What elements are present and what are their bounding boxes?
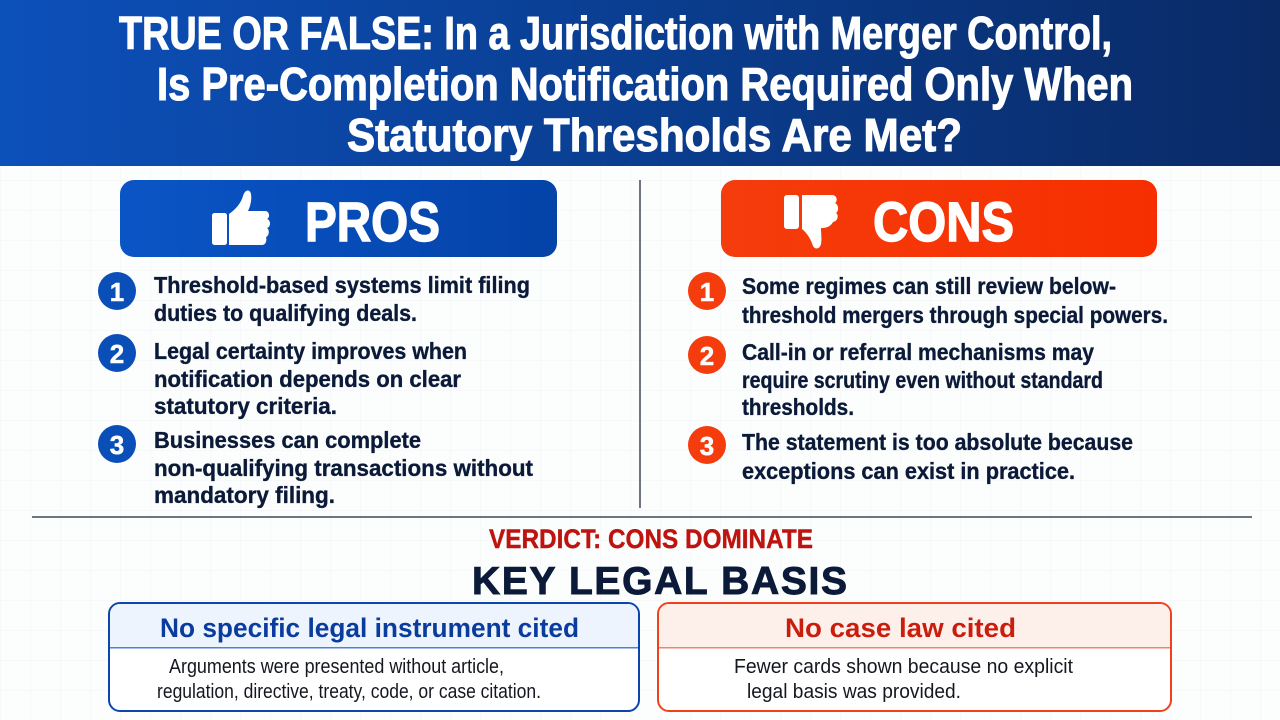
pro item 3: 3 — [110, 430, 124, 460]
verdict: VERDICT: CONS DOMINATE — [489, 524, 813, 554]
card: legal instrument: No specific legal instrument cited — [160, 613, 579, 643]
title banner: Statutory Thresholds Are Met? — [347, 109, 962, 161]
pro item 2: notification depends on clear — [154, 366, 461, 392]
con item 3 — [688, 426, 1133, 484]
con item 2: Call-in or referral mechanisms may — [742, 339, 1094, 365]
card: case law: No case law cited — [785, 613, 1016, 643]
pro item 2 — [98, 334, 467, 419]
pros heading: PROS — [305, 190, 440, 253]
pro item 1: Threshold-based systems limit filing — [154, 272, 530, 298]
card: legal instrument — [109, 603, 639, 711]
pro item 2: Legal certainty improves when — [154, 338, 467, 364]
panel: cons — [688, 180, 1168, 484]
con item 3: The statement is too absolute because — [742, 429, 1133, 455]
pro item 1: 1 — [110, 277, 124, 307]
panel: pros — [98, 180, 557, 508]
con item 1: 1 — [700, 277, 714, 307]
icon: thumbs up — [212, 190, 270, 245]
title banner: Is Pre-Completion Notification Required Only When — [157, 58, 1133, 110]
card: legal instrument: regulation, directive, treaty, code, or case citation. — [157, 681, 541, 703]
con item 1: Some regimes can still review below- — [742, 273, 1116, 299]
icon: thumbs down — [784, 195, 838, 248]
con item 2: 2 — [700, 341, 714, 371]
title banner — [0, 0, 1280, 166]
key legal basis heading: KEY LEGAL BASIS — [472, 560, 847, 603]
cons heading: CONS — [873, 190, 1014, 253]
card: case law — [658, 603, 1171, 711]
con item 2 — [688, 336, 1103, 420]
con item 3: 3 — [700, 431, 714, 461]
pro item 1: duties to qualifying deals. — [154, 300, 417, 326]
card: legal instrument: Arguments were presented without article, — [169, 656, 504, 678]
card: case law: legal basis was provided. — [747, 681, 961, 703]
con item 2: require scrutiny even without standard — [742, 367, 1103, 393]
pro item 1 — [98, 272, 530, 326]
con item 1: threshold mergers through special powers. — [742, 302, 1168, 328]
pro item 3: mandatory filing. — [154, 482, 335, 508]
cons heading — [721, 180, 1157, 257]
pro item 3: Businesses can complete — [154, 427, 421, 453]
con item 3: exceptions can exist in practice. — [742, 458, 1075, 484]
pro item 3 — [98, 425, 533, 508]
pro item 3: non-qualifying transactions without — [154, 455, 533, 481]
card: case law: Fewer cards shown because no explicit — [734, 656, 1073, 678]
pro item 2: statutory criteria. — [154, 393, 337, 419]
pro item 2: 2 — [110, 339, 124, 369]
pros heading — [120, 180, 557, 257]
con item 2: thresholds. — [742, 394, 854, 420]
con item 1 — [688, 272, 1168, 328]
